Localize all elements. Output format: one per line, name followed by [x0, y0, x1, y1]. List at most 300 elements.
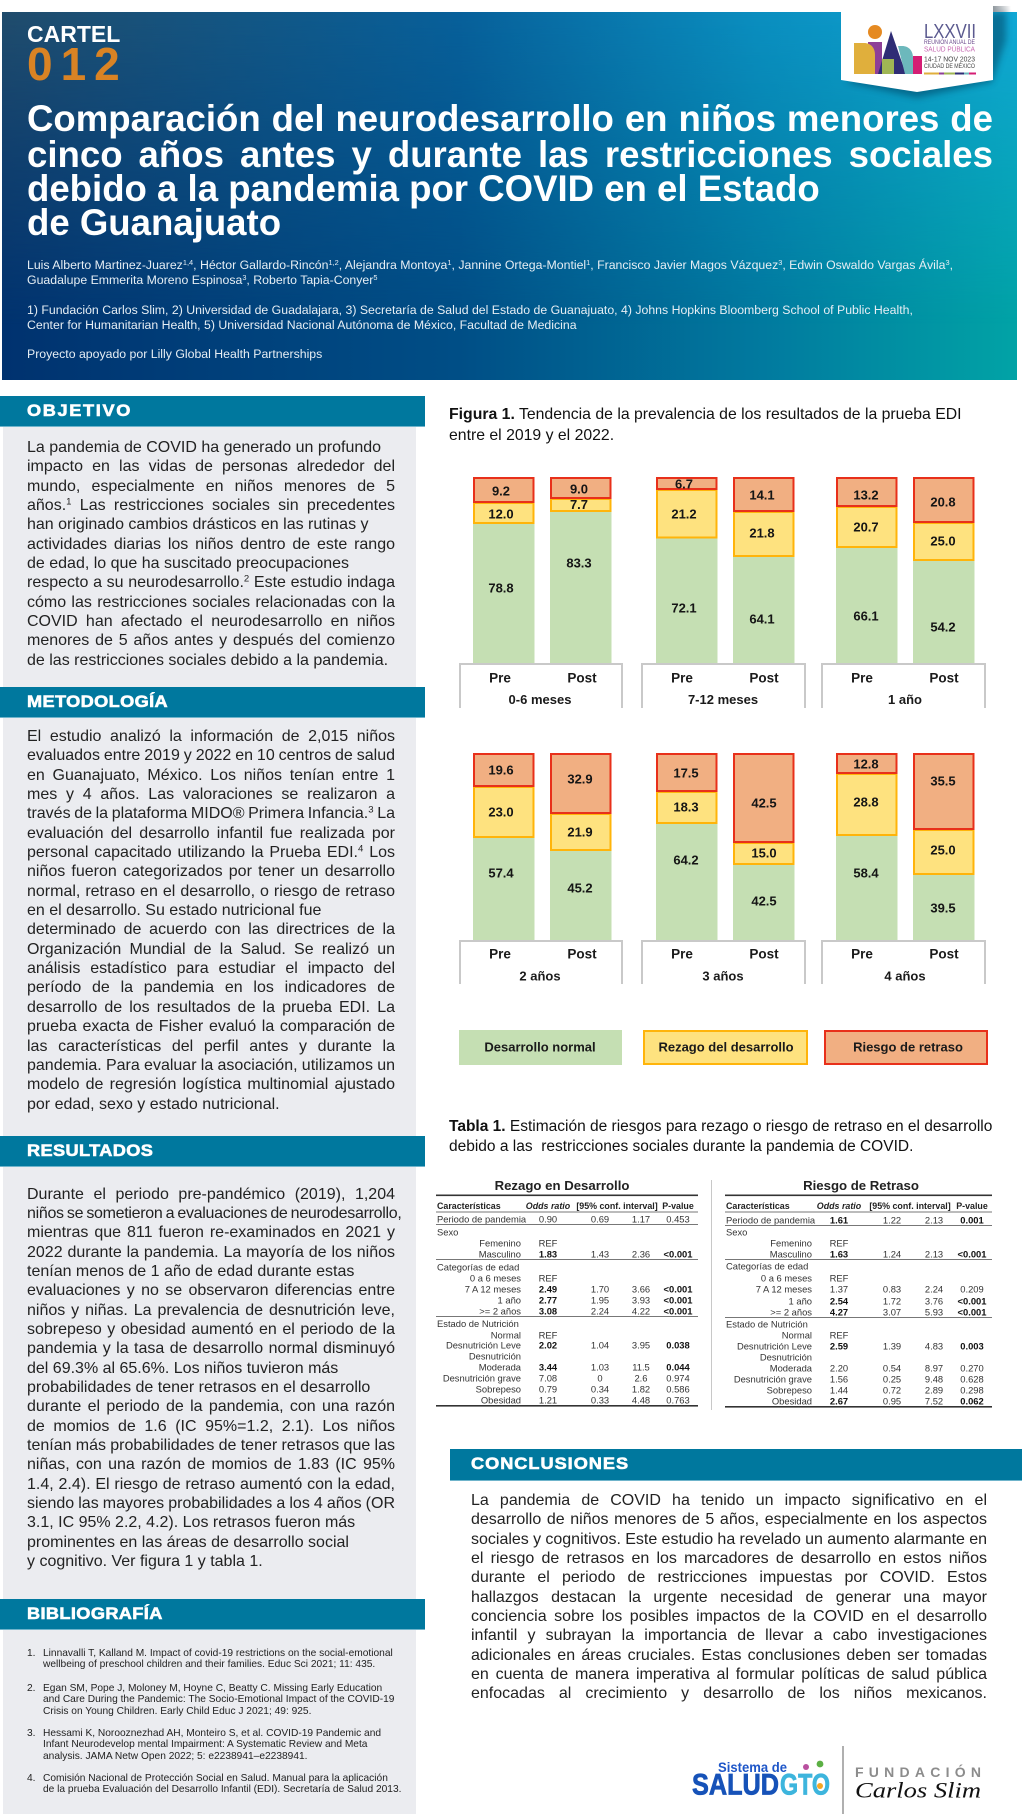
table: riesgo de retraso: 2.89: [925, 1384, 943, 1396]
text: metodología: normal, retraso en el desarrollo, o riesgo de retraso: [27, 883, 395, 900]
text: resultados: prominentes en las áreas de desarrollo social: [27, 1534, 349, 1551]
references list: [27, 1648, 401, 1795]
table: riesgo de retraso: <0.001: [958, 1248, 986, 1260]
references list: 3.: [27, 1728, 36, 1739]
table: rezago en desarrollo: 3.93: [632, 1294, 650, 1306]
affiliations: [27, 303, 913, 332]
references list: analysis. JAMA Netw Open 2022; 5: e2238941–e2238941.: [43, 1751, 308, 1762]
table: riesgo de retraso: [725, 1178, 992, 1408]
table: riesgo de retraso: 1.44: [830, 1384, 848, 1396]
chart: 7-12 meses: 7-12 meses: [688, 692, 758, 707]
table: rezago en desarrollo: <0.001: [664, 1306, 692, 1316]
table: riesgo de retraso: 0.003: [960, 1340, 984, 1352]
chart: 3 años: [642, 753, 805, 984]
table: rezago en desarrollo: Sobrepeso: [476, 1384, 521, 1394]
heading: bibliografía: BIBLIOGRAFÍA: [27, 1605, 163, 1623]
table: rezago en desarrollo: Desnutrición grave: [443, 1372, 521, 1384]
table: rezago en desarrollo: 0.79: [539, 1384, 557, 1394]
table: riesgo de retraso: 1.22: [883, 1214, 901, 1226]
references list: 2.: [27, 1683, 36, 1694]
text: conclusiones: [471, 1492, 988, 1702]
title: debido a la pandemia por COVID en el Estado: [27, 168, 820, 209]
text: resultados: niños se sometieron a evaluaciones de neurodesarrollo,: [27, 1205, 402, 1222]
table caption: debido a las restricciones sociales durante la pandemia de COVID.: [449, 1138, 913, 1155]
text: conclusiones: enfocadas al crecimiento y desarrollo de los niños mexicanos.: [471, 1685, 987, 1702]
table: rezago en desarrollo: Sexo: [437, 1226, 458, 1238]
table: rezago en desarrollo: 1.21: [539, 1394, 557, 1406]
table: rezago en desarrollo: 3.44: [539, 1362, 558, 1372]
text: objetivo: menores de 5 años antes y después del comienzo: [27, 632, 395, 649]
text: resultados: [27, 1186, 402, 1570]
table: rezago en desarrollo: [436, 1178, 698, 1407]
text: objetivo: La pandemia de COVID ha generado un profundo: [27, 439, 381, 456]
text: metodología: período de la pandemia en los indicadores de: [27, 979, 395, 996]
table: riesgo de retraso: 0.270: [960, 1362, 984, 1374]
legend: Desarrollo normal: [484, 1040, 596, 1054]
chart: 1 año: [822, 477, 985, 708]
figure caption: entre el 2019 y el 2022.: [449, 426, 614, 444]
table: rezago en desarrollo: 4.22: [632, 1306, 650, 1316]
table caption: [449, 1118, 992, 1155]
text: resultados: probabilidades de tener retrasos en el desarrollo: [27, 1379, 370, 1396]
heading: resultados: RESULTADOS: [27, 1142, 153, 1160]
text: objetivo: COVID han afectado el neurodesarrollo en niños: [27, 613, 395, 630]
table: riesgo de retraso: 2.20: [830, 1362, 848, 1374]
text: objetivo: de edad, lo que ha suscitado preocupaciones: [27, 555, 349, 572]
chart: 3 años: Post: [749, 946, 779, 962]
logo badge: LXXVII Reunión Anual de Salud Pública: CIUDAD DE MÉXICO: [924, 63, 975, 70]
logo: Sistema de Salud GTO: SALUD: [692, 1768, 779, 1802]
text: metodología: evaluación del desarrollo infantil fue realizada por: [27, 825, 395, 842]
chart: 1 año: 13.2: [853, 488, 879, 502]
logo: Fundación Carlos Slim: [855, 1763, 981, 1802]
panel: metodología: [0, 687, 425, 1136]
table: riesgo de retraso: 0.628: [960, 1374, 984, 1384]
table: riesgo de retraso: 0.72: [883, 1384, 901, 1396]
table: riesgo de retraso: Desnutrición Leve: [737, 1340, 812, 1352]
logo badge: LXXVII Reunión Anual de Salud Pública: LXXVII: [924, 21, 976, 43]
table: riesgo de retraso: Moderada: [770, 1362, 813, 1374]
references list: Comisión Nacional de Protección Social en Salud. Manual para la aplicación: [43, 1773, 388, 1784]
logo badge: LXXVII Reunión Anual de Salud Pública: [841, 6, 1010, 100]
table: rezago en desarrollo: 2.77: [539, 1294, 557, 1306]
table: riesgo de retraso: 1.61: [830, 1214, 848, 1226]
table: rezago en desarrollo: REF: [539, 1238, 558, 1248]
chart: 2 años: [460, 753, 622, 984]
table: riesgo de retraso: 2.54: [830, 1296, 849, 1306]
chart: 1 año: 20.8: [930, 494, 956, 510]
table: rezago en desarrollo: 11.5: [632, 1362, 650, 1372]
chart: 0-6 meses: 9.0: [570, 482, 588, 496]
table: riesgo de retraso: 2.59: [830, 1340, 848, 1352]
chart: 7-12 meses: 6.7: [675, 476, 693, 492]
logo badge: LXXVII Reunión Anual de Salud Pública: 14-17 NOV 2023: [924, 54, 975, 64]
table: rezago en desarrollo: 2.6: [634, 1372, 648, 1384]
table: rezago en desarrollo: 2.36: [632, 1248, 650, 1260]
table: riesgo de retraso: <0.001: [958, 1296, 986, 1306]
text: metodología: [27, 728, 396, 1113]
chart: 4 años: 35.5: [930, 774, 956, 788]
text: resultados: evaluaciones y no se observaron diferencias entre: [27, 1282, 395, 1299]
table: riesgo de retraso: 1.37: [830, 1284, 848, 1294]
text: objetivo: han originado cambios drásticos en las rutinas y: [27, 516, 369, 533]
table: rezago en desarrollo: Odds ratio: [526, 1201, 571, 1211]
legend: Rezago del desarrollo: [658, 1040, 794, 1054]
table: riesgo de retraso: 0.001: [960, 1214, 984, 1226]
table: rezago en desarrollo: Categorías de edad: [437, 1262, 519, 1272]
chart: 2 años: 23.0: [488, 804, 514, 820]
table: rezago en desarrollo: 7.08: [539, 1372, 557, 1384]
logo: Fundación Carlos Slim: FUNDACIÓN: [855, 1763, 981, 1780]
text: metodología: El estudio analizó la información de 2,015 niños: [27, 728, 395, 745]
text: conclusiones: hallazgos destacan la urgente necesidad de generar una mayor: [471, 1589, 987, 1606]
text: conclusiones: La pandemia de COVID ha tenido un impacto significativo en el: [471, 1492, 987, 1509]
text: conclusiones: conciencia sobre los posibles impactos de la COVID en el desarrollo: [471, 1608, 987, 1625]
table: riesgo de retraso: Odds ratio: [817, 1201, 862, 1211]
text: metodología: personal capacitado utilizando la Prueba EDI.4 Los: [27, 844, 395, 861]
table: rezago en desarrollo: 1.17: [632, 1214, 650, 1224]
chart: 1 año: 66.1: [853, 608, 879, 624]
table: riesgo de retraso: 0.209: [960, 1284, 984, 1294]
chart: 3 años: 42.5: [751, 796, 777, 810]
table: rezago en desarrollo: 0.763: [666, 1394, 690, 1406]
chart: 7-12 meses: 72.1: [671, 600, 697, 616]
references list: Linnavalli T, Kalland M. Impact of covid-19 restrictions on the social-emotional: [43, 1648, 393, 1659]
table: rezago en desarrollo: 1.03: [591, 1362, 609, 1372]
table: rezago en desarrollo: <0.001: [664, 1248, 692, 1260]
chart: 0-6 meses: 0-6 meses: [509, 692, 571, 707]
table: riesgo de retraso: 1.24: [883, 1248, 901, 1260]
table: rezago en desarrollo: 1.82: [632, 1384, 650, 1394]
text: resultados: sobrepeso y obesidad aumentó en el periodo de la: [27, 1321, 395, 1338]
table: rezago en desarrollo: 0.044: [666, 1362, 691, 1372]
chart: 1 año: 20.7: [853, 520, 879, 534]
table: riesgo de retraso: 1.72: [883, 1296, 901, 1306]
table: riesgo de retraso: Periodo de pandemia: [726, 1214, 816, 1226]
table: riesgo de retraso: 0.062: [960, 1396, 984, 1406]
chart: 4 años: 12.8: [853, 756, 879, 772]
text: metodología: prueba exacta de Fisher evaluó la comparación de: [27, 1018, 395, 1035]
table: riesgo de retraso: 1.56: [830, 1374, 848, 1384]
text: objetivo: actividades diarias los niños dentro de este rango: [27, 536, 395, 553]
table caption: Tabla 1. Estimación de riesgos para rezago o riesgo de retraso en el desarrollo: [449, 1118, 992, 1135]
text: metodología: en Guanajuato, México. Los niños tenían entre 1: [27, 767, 395, 784]
chart: 3 años: 3 años: [702, 968, 744, 984]
text: metodología: por edad, sexo y estado nutricional.: [27, 1096, 280, 1113]
table: riesgo de retraso: 7 A 12 meses: [756, 1284, 812, 1294]
chart: 1 año: 1 año: [888, 692, 922, 707]
table: rezago en desarrollo: 0.90: [539, 1214, 557, 1224]
text: conclusiones: el riesgo de retrasos en los marcadores de desarrollo en estos niños: [471, 1550, 987, 1567]
heading: objetivo: OBJETIVO: [27, 402, 132, 420]
table: riesgo de retraso: 2.24: [925, 1284, 943, 1294]
header banner: [2, 12, 1017, 380]
table: riesgo de retraso: Masculino: [770, 1248, 812, 1260]
chart: 2 años: Pre: [489, 946, 511, 962]
text: objetivo: impacto en las vidas de personas alrededor del: [27, 458, 395, 475]
table: rezago en desarrollo: 1.83: [539, 1248, 557, 1260]
text: objetivo: [27, 439, 396, 669]
chart: 4 años: 4 años: [884, 968, 926, 984]
chart: 0-6 meses: Post: [567, 670, 597, 686]
table: rezago en desarrollo: Femenino: [479, 1238, 521, 1248]
table: rezago en desarrollo: Masculino: [479, 1248, 521, 1260]
chart: 2 años: Post: [567, 946, 597, 962]
chart: 3 años: Pre: [671, 946, 693, 962]
chart: 2 años: 32.9: [567, 772, 593, 786]
table: riesgo de retraso: Riesgo de Retraso: [803, 1178, 919, 1193]
table: riesgo de retraso: Normal: [782, 1330, 812, 1340]
table: riesgo de retraso: Estado de Nutrición: [726, 1318, 808, 1330]
logo badge: LXXVII Reunión Anual de Salud Pública: REUNIÓN ANUAL DE: [924, 39, 975, 46]
table: rezago en desarrollo: 0: [597, 1372, 603, 1384]
logo: Sistema de Salud GTO: GTO: [780, 1768, 830, 1802]
table: riesgo de retraso: 1 año: [789, 1296, 812, 1306]
table: rezago en desarrollo: 1.04: [591, 1340, 609, 1350]
chart: 7-12 meses: 14.1: [749, 488, 775, 502]
table: rezago en desarrollo: 0 a 6 meses: [470, 1272, 521, 1284]
table: riesgo de retraso: Desnutrición grave: [734, 1374, 812, 1384]
chart: 1 año: Pre: [851, 670, 873, 686]
text: metodología: Organización Mundial de la Salud. Se realizó un: [27, 941, 395, 958]
table: riesgo de retraso: 3.76: [925, 1296, 943, 1306]
chart: 0-6 meses: 12.0: [488, 506, 514, 522]
chart: 4 años: 28.8: [853, 794, 879, 810]
text: resultados: 3.1, IC 95% 2.2, 4.2). Los retrasos fueron más: [27, 1514, 355, 1531]
text: objetivo: cómo las restricciones sociales relacionadas con la: [27, 594, 395, 611]
heading: conclusiones: [450, 1449, 1022, 1481]
table: riesgo de retraso: Características: [726, 1201, 790, 1211]
table: rezago en desarrollo: <0.001: [664, 1294, 692, 1306]
heading: bibliografía: [0, 1599, 425, 1630]
table: rezago en desarrollo: 1.43: [591, 1248, 609, 1260]
text: metodología: niños fueron categorizados por tener un desarrollo: [27, 863, 395, 880]
table: riesgo de retraso: 1.63: [830, 1248, 848, 1260]
chart: 3 años: 42.5: [751, 894, 777, 908]
funding note: Proyecto apoyado por Lilly Global Health Partnerships: [27, 347, 322, 361]
chart: 3 años: 17.5: [673, 766, 699, 780]
table: riesgo de retraso: 0.83: [883, 1284, 901, 1294]
text: metodología: través de la plataforma MIDO® Primera Infancia.3 La: [27, 805, 395, 822]
table: rezago en desarrollo: REF: [539, 1272, 558, 1284]
table: riesgo de retraso: 0.25: [883, 1374, 901, 1384]
table: riesgo de retraso: <0.001: [958, 1306, 986, 1318]
table: rezago en desarrollo: 0.586: [666, 1384, 690, 1394]
chart: 0-6 meses: [460, 477, 622, 708]
table: rezago en desarrollo: REF: [539, 1330, 558, 1340]
table: rezago en desarrollo: 0.34: [591, 1384, 609, 1394]
references list: Crisis on Young Children. Early Child Educ J 2021; 49: 925.: [43, 1706, 311, 1717]
chart: 0-6 meses: 78.8: [488, 580, 514, 596]
table: riesgo de retraso: 3.07: [883, 1306, 901, 1318]
chart: 4 años: Pre: [851, 946, 873, 962]
title: de Guanajuato: [27, 202, 281, 243]
table: riesgo de retraso: Obesidad: [772, 1396, 812, 1406]
table: rezago en desarrollo: [95% conf. interval]: [576, 1201, 658, 1211]
table: riesgo de retraso: Desnutrición: [760, 1352, 812, 1362]
figure caption: Figura 1. Tendencia de la prevalencia de los resultados de la prueba EDI: [449, 406, 962, 423]
table: riesgo de retraso: REF: [830, 1238, 849, 1248]
table: rezago en desarrollo: Desnutrición: [469, 1350, 521, 1362]
table: riesgo de retraso: 0.95: [883, 1396, 901, 1406]
text: metodología: evaluados entre 2019 y 2022 en 10 centros de salud: [27, 747, 395, 764]
table: rezago en desarrollo: 0.33: [591, 1394, 609, 1406]
chart: 4 años: 58.4: [853, 866, 879, 880]
references list: and Care During the Pandemic: The Socio-Emotional Impact of the COVID-19: [43, 1694, 394, 1705]
table: riesgo de retraso: REF: [830, 1272, 849, 1284]
heading: resultados: [0, 1136, 425, 1167]
table: rezago en desarrollo: 0.453: [666, 1214, 690, 1224]
chart: 7-12 meses: [642, 476, 805, 708]
table: rezago en desarrollo: 3.95: [632, 1340, 650, 1350]
text: conclusiones: desarrollo de niños menores de 5 años, especialmente en los aspectos: [471, 1511, 987, 1528]
text: metodología: desarrollo de los resultados de la prueba EDI. La: [27, 999, 395, 1016]
logo badge: LXXVII Reunión Anual de Salud Pública: SALUD PÚBLICA: [924, 44, 975, 54]
chart: 4 años: [822, 753, 985, 984]
table: riesgo de retraso: Femenino: [770, 1238, 812, 1248]
table: rezago en desarrollo: 1 año: [498, 1294, 521, 1306]
tables: [436, 1178, 992, 1410]
chart: 2 años: 57.4: [488, 866, 514, 880]
title: [27, 98, 993, 243]
title: cinco años antes y durante las restricciones sociales: [27, 134, 993, 175]
table: rezago en desarrollo: 4.48: [632, 1394, 650, 1406]
text: conclusiones: adicionales en áreas cruciales. Estas conclusiones deben ser tomadas: [471, 1647, 987, 1664]
table: riesgo de retraso: Sobrepeso: [767, 1384, 812, 1396]
table: rezago en desarrollo: P-value: [662, 1201, 694, 1211]
heading: conclusiones: CONCLUSIONES: [471, 1455, 629, 1473]
table: rezago en desarrollo: 3.66: [632, 1284, 650, 1294]
chart: 7-12 meses: Post: [749, 670, 779, 686]
table: riesgo de retraso: 2.13: [925, 1248, 943, 1260]
table: rezago en desarrollo: Obesidad: [481, 1394, 521, 1406]
text: metodología: las características del perfil antes y durante la: [27, 1038, 395, 1054]
table: riesgo de retraso: 2.13: [925, 1214, 943, 1226]
heading: metodología: METODOLOGÍA: [27, 693, 168, 711]
table: rezago en desarrollo: Periodo de pandemia: [437, 1214, 527, 1224]
title: Comparación del neurodesarrollo en niños menores de: [27, 98, 993, 139]
logo: Sistema de Salud GTO: [692, 1759, 830, 1802]
table: riesgo de retraso: 2.67: [830, 1396, 848, 1406]
text: resultados: tenían menos de 1 año de edad durante estas: [27, 1263, 354, 1280]
chart: 1 año: Post: [929, 670, 959, 686]
table: rezago en desarrollo: 2.02: [539, 1340, 557, 1350]
chart: 3 años: 64.2: [673, 852, 699, 868]
table: rezago en desarrollo: Rezago en Desarrollo: [495, 1178, 629, 1193]
text: resultados: 2022 durante la pandemia. La mayoría de los niños: [27, 1244, 395, 1261]
references list: 1.: [27, 1648, 36, 1659]
poster number: 012: [27, 38, 128, 90]
text: resultados: pandemia y la tasa de desarrollo normal disminuyó: [27, 1340, 395, 1357]
table: riesgo de retraso: 4.83: [925, 1340, 943, 1352]
table: riesgo de retraso: REF: [830, 1330, 849, 1340]
text: objetivo: respecto a su neurodesarrollo.2 Este estudio indaga: [27, 574, 395, 591]
chart: 2 años: 45.2: [567, 880, 593, 896]
table: rezago en desarrollo: 2.49: [539, 1284, 557, 1294]
text: resultados: Durante el periodo pre-pandémico (2019), 1,204: [27, 1186, 395, 1202]
references list: Egan SM, Pope J, Moloney M, Hoyne C, Beatty C. Missing Early Education: [43, 1683, 382, 1694]
table: rezago en desarrollo: <0.001: [664, 1284, 692, 1294]
chart: 7-12 meses: 21.8: [749, 526, 775, 540]
panel: bibliografía: [0, 1599, 425, 1814]
chart: 0-6 meses: 7.7: [570, 497, 588, 512]
text: resultados: tenían más probabilidades de tener retrasos que las: [27, 1437, 395, 1454]
chart: 0-6 meses: Pre: [489, 670, 511, 686]
text: resultados: y cognitivo. Ver figura 1 y tabla 1.: [27, 1553, 263, 1570]
table: rezago en desarrollo: 3.08: [539, 1306, 557, 1316]
references list: 4.: [27, 1773, 36, 1784]
chart: 7-12 meses: Pre: [671, 670, 693, 686]
panel: objetivo: [0, 396, 425, 687]
footer logos: [692, 1746, 981, 1814]
chart: 3 años: 15.0: [751, 846, 777, 860]
table: riesgo de retraso: 8.97: [925, 1362, 943, 1374]
table: rezago en desarrollo: 7 A 12 meses: [465, 1284, 521, 1294]
logo: Sistema de Salud GTO: Sistema de: [718, 1759, 787, 1775]
affiliations: Center for Humanitarian Health, 5) Universidad Nacional Autónoma de México, Facultad de Medicina: [27, 318, 577, 332]
table: rezago en desarrollo: Características: [437, 1201, 501, 1211]
chart: 0-6 meses: 9.2: [492, 484, 510, 498]
affiliations: 1) Fundación Carlos Slim, 2) Universidad de Guadalajara, 3) Secretaría de Salud del Estado de Guanajuato, 4) Johns Hopkins Bloomberg School of Public Health,: [27, 303, 913, 317]
table: riesgo de retraso: >= 2 años: [770, 1306, 812, 1318]
chart: 3 años: 18.3: [673, 800, 699, 814]
chart: 1 año: 54.2: [930, 620, 956, 634]
text: resultados: durante el periodo de la pandemia, con una razón: [27, 1398, 395, 1415]
text: metodología: análisis estadístico para estudiar el impacto del: [27, 960, 395, 977]
table: riesgo de retraso: Categorías de edad: [726, 1260, 808, 1272]
chart: 2 años: 2 años: [519, 968, 561, 984]
text: resultados: del 69.3% al 65.6%. Los niños tuvieron más: [27, 1360, 338, 1377]
table: rezago en desarrollo: 2.24: [591, 1306, 609, 1316]
chart: 0-6 meses: 83.3: [566, 556, 592, 570]
text: resultados: 1.4, 2.4). El riesgo de retraso aumentó con la edad,: [27, 1476, 395, 1493]
heading: objetivo: [0, 396, 425, 427]
legend: [459, 1030, 987, 1065]
text: metodología: determinado de acuerdo con las directrices de la: [27, 921, 395, 938]
chart: 7-12 meses: 64.1: [749, 612, 775, 626]
references list: Hessami K, Norooznezhad AH, Monteiro S, et al. COVID-19 Pandemic and: [43, 1728, 381, 1739]
panel: conclusiones: [450, 1449, 1022, 1702]
authors: Guadalupe Emmerita Moreno Espinosa3, Roberto Tapia-Conyer5: [27, 273, 377, 287]
chart: 1 año: 25.0: [930, 534, 956, 548]
figure 1: stacked bar charts: [459, 476, 988, 1065]
table: rezago en desarrollo: Desnutrición Leve: [446, 1340, 521, 1350]
table: rezago en desarrollo: 0.69: [591, 1214, 609, 1224]
table: rezago en desarrollo: 0.974: [666, 1372, 690, 1384]
heading: metodología: [0, 687, 425, 718]
text: conclusiones: sociales y cognitivos. Este estudio ha revelado un aumento alarmante en: [471, 1531, 987, 1548]
references list: de la prueba Evaluación del Desarrollo Infantil (EDI). Secretaría de Salud 2013.: [43, 1784, 401, 1795]
text: resultados: niñas, con una razón de momios de 1.83 (IC 95%: [27, 1456, 395, 1473]
text: metodología: pandemia. Para evaluar la asociación, utilizamos un: [27, 1057, 395, 1074]
poster label: CARTEL: [27, 21, 120, 47]
table: rezago en desarrollo: 0.038: [666, 1340, 690, 1350]
text: objetivo: de las restricciones sociales debido a la pandemia.: [27, 652, 388, 669]
table: riesgo de retraso: 1.39: [883, 1340, 901, 1352]
text: metodología: modelo de regresión logística multinomial ajustado: [27, 1076, 395, 1093]
text: conclusiones: durante el periodo de restricciones impuestas por COVID. Estos: [471, 1569, 987, 1586]
text: resultados: siendo las mayores probabilidades a los 4 años (OR: [27, 1495, 395, 1512]
table: rezago en desarrollo: Estado de Nutrición: [437, 1318, 519, 1329]
table: riesgo de retraso: Sexo: [726, 1226, 747, 1238]
table: rezago en desarrollo: 1.95: [591, 1294, 609, 1306]
table: riesgo de retraso: 7.52: [925, 1396, 943, 1406]
text: objetivo: años.1 Las restricciones sociales sin precedentes: [27, 497, 395, 514]
table: riesgo de retraso: 0 a 6 meses: [761, 1272, 812, 1284]
table: rezago en desarrollo: Moderada: [479, 1362, 522, 1372]
logo: Fundación Carlos Slim: Carlos Slim: [855, 1778, 981, 1802]
table: riesgo de retraso: [95% conf. interval]: [869, 1201, 951, 1211]
